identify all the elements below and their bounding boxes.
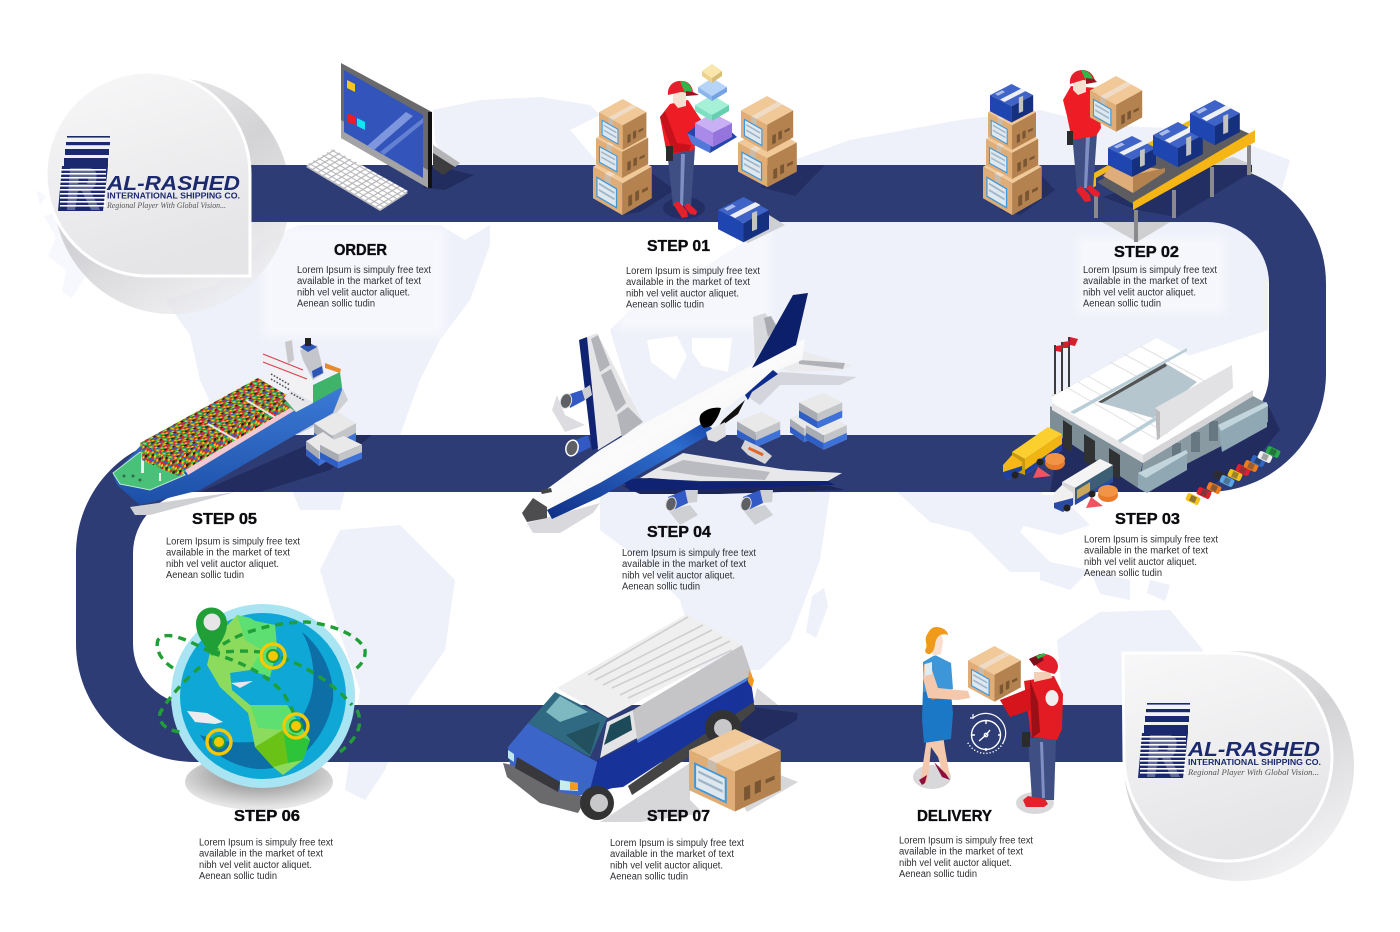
text: step 06 description: Lorem Ipsum is simpuly free text [199, 838, 333, 848]
text: delivery description: nibh vel velit auctor aliquet. [899, 858, 1012, 869]
text: step 03 description: Aenean sollic tudin [1084, 568, 1162, 579]
text: step 03 description [1084, 534, 1218, 579]
logo badge: bottom right: Regional Player With Global Vision... [1187, 768, 1319, 777]
icon: delivery clock [967, 713, 1006, 753]
logo shadow: bottom right [1124, 651, 1354, 881]
heading: step 04: STEP 04 [647, 524, 711, 541]
illustration: step 04 cargo airplane [522, 293, 857, 533]
illustration: step 01 worker with parcels [593, 64, 825, 243]
world map background [36, 97, 1290, 800]
text: step 02 description: Lorem Ipsum is simpuly free text [1083, 265, 1217, 276]
yellow truck [1003, 427, 1062, 480]
text: order description: Lorem Ipsum is simpuly free text [297, 265, 431, 276]
heading: step 03: STEP 03 [1115, 511, 1180, 528]
logo badge: top left: Regional Player With Global Vision... [106, 201, 226, 210]
text: step 07 description: Lorem Ipsum is simpuly free text [610, 838, 744, 849]
text: step 05 description [166, 536, 300, 581]
text: step 02 description [1083, 265, 1217, 310]
text: step 04 description: Aenean sollic tudin [622, 582, 700, 593]
text: step 05 description: Aenean sollic tudin [166, 570, 244, 581]
text: step 07 description: Aenean sollic tudin [610, 872, 688, 883]
heading: step 07: STEP 07 [647, 808, 710, 825]
logo badge: top left [46, 72, 250, 276]
logo badge: bottom right [1123, 653, 1332, 861]
text: step 03 description: available in the market of text [1084, 546, 1208, 557]
text: delivery description: Aenean sollic tudin [899, 869, 977, 880]
heading: delivery: DELIVERY [917, 808, 992, 825]
illustration: delivery handover between courier and customer [913, 627, 1063, 814]
white truck [1054, 459, 1113, 512]
text: step 05 description: Lorem Ipsum is simpuly free text [166, 536, 300, 548]
illustration: step 03 warehouse with trucks and cars [1003, 337, 1281, 512]
text: step 04 description [622, 548, 756, 593]
text: step 07 description: available in the market of text [610, 849, 734, 860]
text: step 06 description: nibh vel velit auctor aliquet. [199, 860, 312, 871]
text: delivery description [899, 836, 1033, 880]
logo shadow: top left [54, 78, 290, 314]
icon: computer and keyboard [306, 63, 474, 211]
text: step 04 description: Lorem Ipsum is simpuly free text [622, 548, 756, 559]
text: step 02 description: Aenean sollic tudin [1083, 299, 1161, 310]
illustration: step 05 container ship [113, 338, 372, 515]
text: step 03 description: nibh vel velit auctor aliquet. [1084, 557, 1197, 568]
text: order description: nibh vel velit auctor aliquet. [297, 287, 410, 298]
text: step 05 description: nibh vel velit auctor aliquet. [166, 559, 279, 570]
heading: step 06: STEP 06 [234, 808, 300, 825]
illustration: step 06 globe with route markers [157, 604, 365, 810]
text: step 07 description [610, 838, 744, 883]
text: step 01 description: nibh vel velit auctor aliquet. [626, 288, 739, 299]
text: order description [297, 265, 431, 310]
text: step 03 description: Lorem Ipsum is simpuly free text [1084, 534, 1218, 546]
text: step 07 description: nibh vel velit auctor aliquet. [610, 860, 723, 871]
text: step 05 description: available in the market of text [166, 548, 290, 559]
text: step 01 description: Lorem Ipsum is simpuly free text [626, 266, 760, 277]
text: order description: available in the market of text [297, 276, 421, 287]
logo badge: bottom right: AL-RASHED [1187, 739, 1320, 761]
heading: order: ORDER [334, 242, 387, 259]
heading: step 05: STEP 05 [192, 511, 257, 528]
heading: step 02: STEP 02 [1114, 244, 1179, 261]
text: step 04 description: available in the market of text [622, 559, 746, 570]
logo badge: top left: AL-RASHED [106, 173, 240, 195]
text: step 04 description: nibh vel velit auctor aliquet. [622, 570, 735, 581]
logo badge: bottom right: INTERNATIONAL SHIPPING CO. [1188, 757, 1321, 767]
illustration: step 07 delivery van and parcel [503, 614, 798, 822]
text: step 06 description [199, 838, 333, 882]
text: delivery description: Lorem Ipsum is simpuly free text [899, 836, 1033, 846]
illustration: step 02 worker and conveyor [983, 70, 1255, 242]
text: step 02 description: available in the market of text [1083, 276, 1207, 287]
heading: step 01: STEP 01 [647, 238, 710, 255]
text: order description: Aenean sollic tudin [297, 299, 375, 310]
text: delivery description: available in the market of text [899, 847, 1023, 858]
text: step 02 description: nibh vel velit auctor aliquet. [1083, 287, 1196, 298]
text: step 01 description: available in the market of text [626, 277, 750, 288]
delivery route band [104, 194, 1298, 734]
text: step 06 description: Aenean sollic tudin [199, 871, 277, 882]
logo badge: top left: INTERNATIONAL SHIPPING CO. [107, 190, 240, 200]
text: step 01 description [626, 266, 760, 311]
text: step 06 description: available in the market of text [199, 849, 323, 860]
text: step 01 description: Aenean sollic tudin [626, 300, 704, 311]
